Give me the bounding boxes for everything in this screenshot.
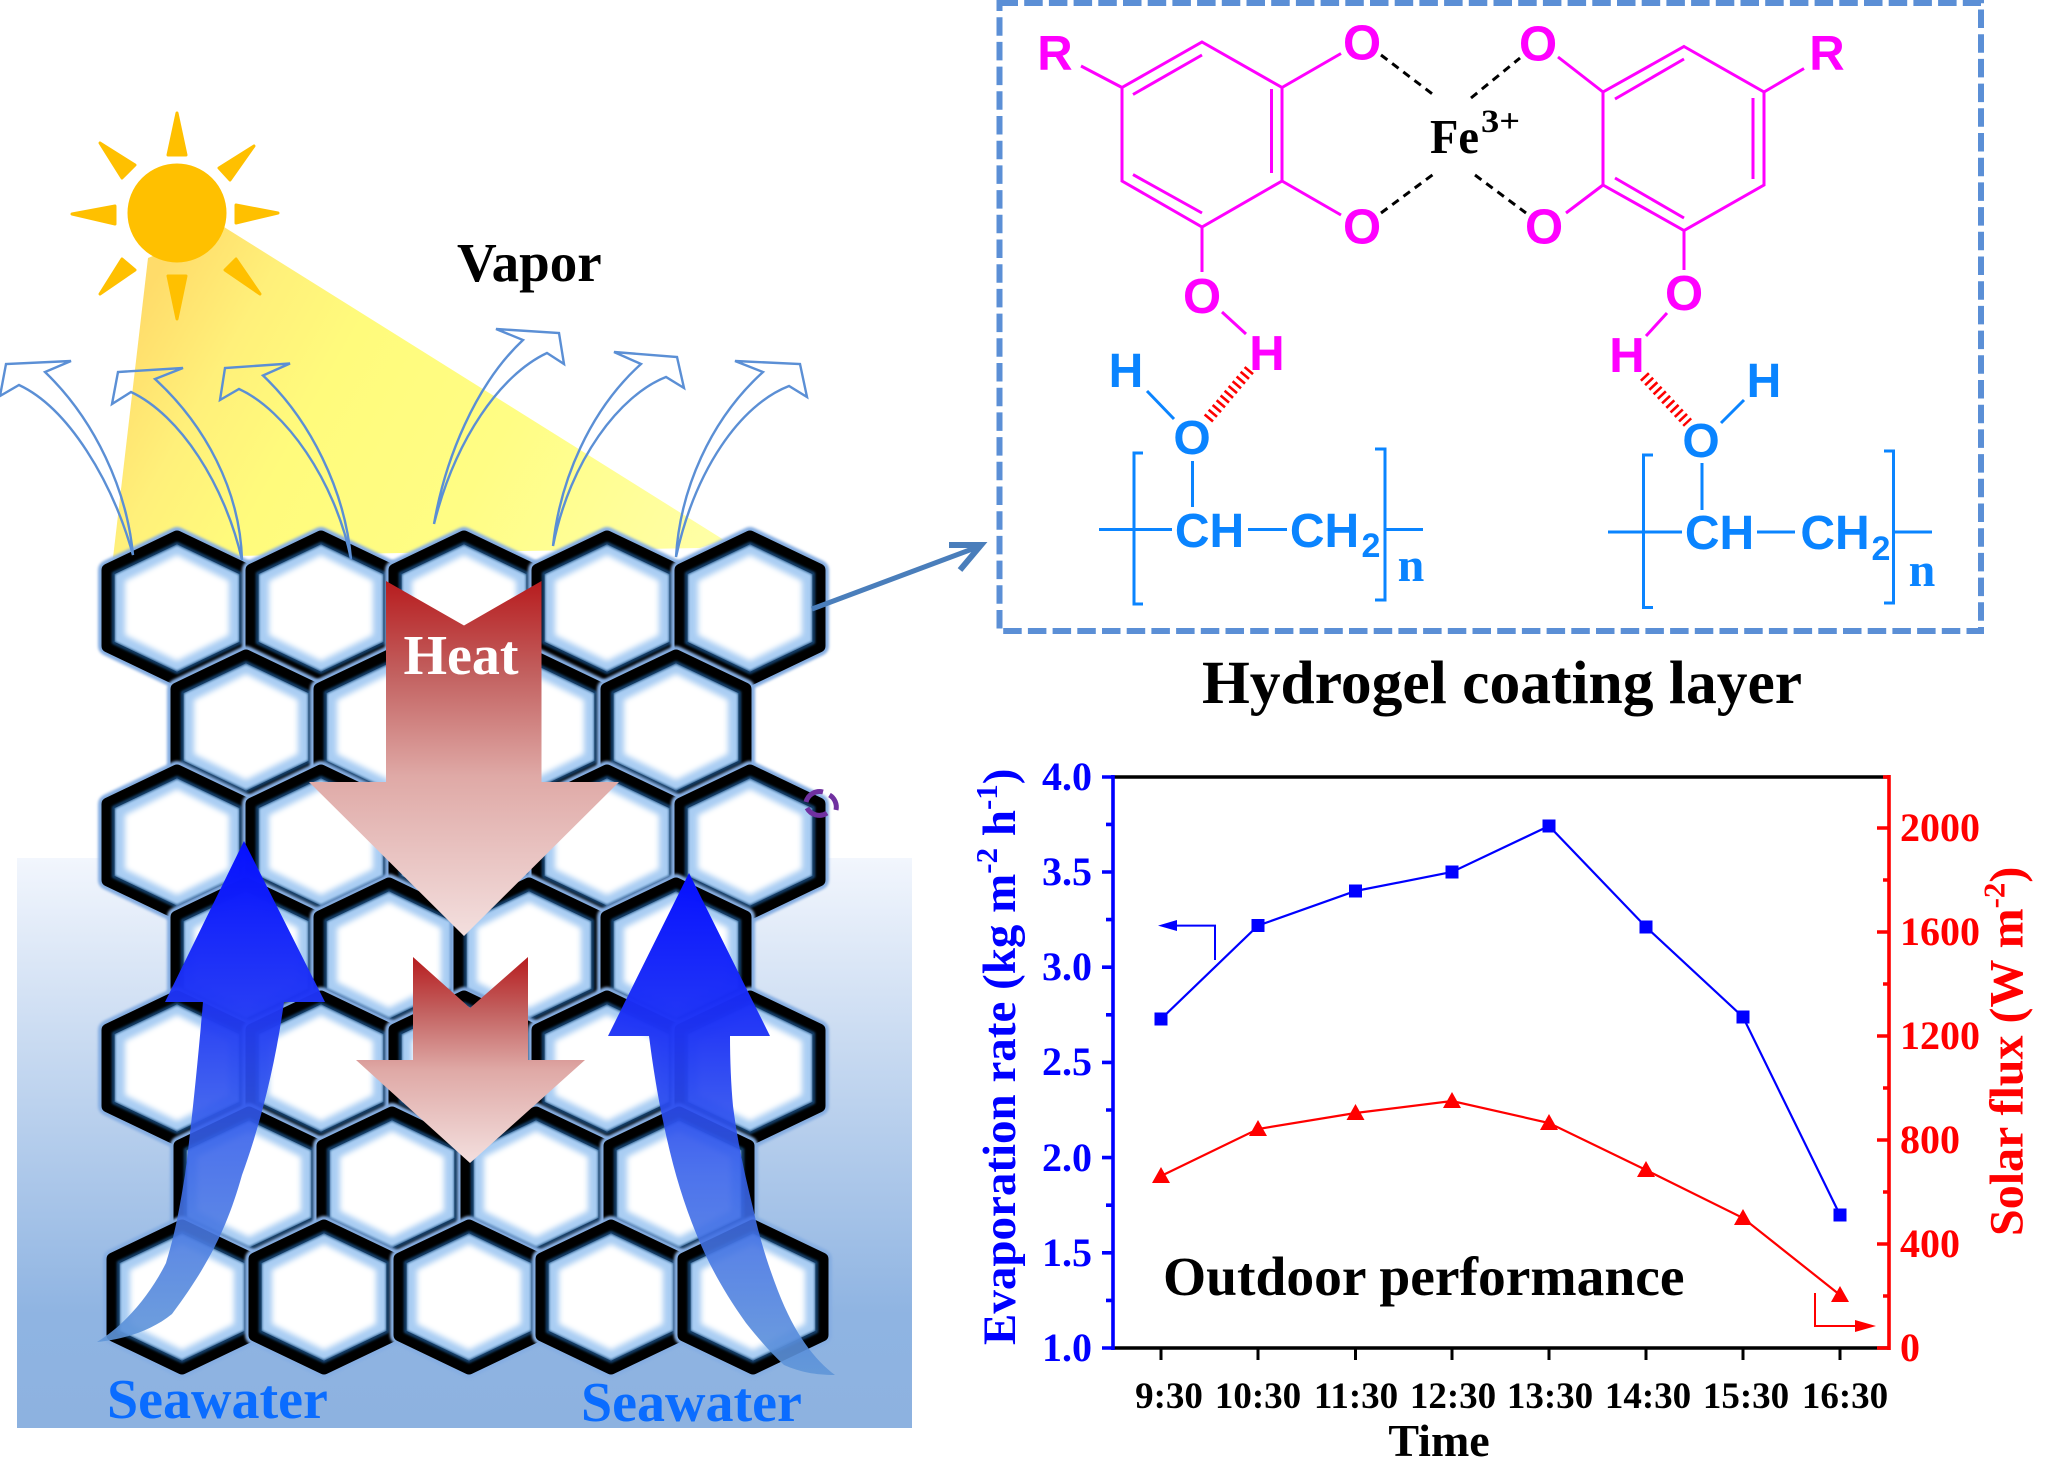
left axis tick labels: 2.0 xyxy=(1042,1135,1092,1180)
right PVA unit: CH xyxy=(1800,507,1870,560)
label: Fe3+: 3+ xyxy=(1481,104,1520,140)
panel: seawater background xyxy=(17,858,912,1428)
left PVA unit: CH xyxy=(1290,505,1359,558)
left axis tick labels: 1.0 xyxy=(1042,1325,1092,1370)
left PVA unit: 2 xyxy=(1362,527,1380,565)
x axis tick labels: 12:30 xyxy=(1410,1376,1496,1417)
x axis tick labels: 9:30 xyxy=(1135,1376,1203,1417)
blue axis indicator arrow xyxy=(1158,920,1215,960)
right PVA unit: CH xyxy=(1685,507,1754,560)
magenta atom labels: O xyxy=(1183,270,1221,324)
right seawater uptake arrow xyxy=(608,873,835,1375)
icon: sun xyxy=(72,113,278,319)
magenta atom labels xyxy=(1037,16,1845,383)
x axis title: Time xyxy=(1388,1415,1490,1466)
right PVA unit: n xyxy=(1909,544,1935,597)
magenta atom labels: H xyxy=(1609,329,1645,383)
right axis tick labels: 400 xyxy=(1900,1221,1960,1266)
right axis tick labels: 0 xyxy=(1900,1325,1920,1370)
left axis title: ) xyxy=(974,769,1026,784)
red axis indicator arrow xyxy=(1815,1293,1876,1332)
sunlight beam xyxy=(113,227,724,558)
chart: outdoor performance xyxy=(969,754,2034,1466)
left axis title: h xyxy=(974,810,1026,848)
magenta atom labels: O xyxy=(1525,200,1563,254)
left axis tick labels xyxy=(1042,754,1092,1370)
magenta atom labels: O xyxy=(1519,18,1557,72)
right axis title: -2 xyxy=(1976,883,2012,908)
magenta atom labels: R xyxy=(1809,27,1845,81)
right PVA unit: O xyxy=(1682,415,1720,468)
right catechol ring xyxy=(1558,46,1804,336)
left axis title: -1 xyxy=(969,784,1004,810)
dashed frame xyxy=(1000,3,1981,631)
right axis title: ) xyxy=(1980,867,2034,883)
left catechol ring xyxy=(1081,42,1341,334)
label: Fe3+: Fe xyxy=(1430,109,1479,164)
left axis tick labels: 1.5 xyxy=(1042,1230,1092,1275)
right PVA unit: 2 xyxy=(1872,530,1890,568)
x axis tick labels: 16:30 xyxy=(1802,1376,1888,1417)
magenta atom labels: O xyxy=(1343,200,1381,254)
label: Fe3+ xyxy=(1430,104,1520,164)
heat arrow: lower xyxy=(356,957,585,1163)
magenta atom labels: O xyxy=(1343,16,1381,70)
label: Vapor: Vapor xyxy=(457,232,602,293)
left PVA unit: H xyxy=(1109,345,1143,398)
x axis tick labels: 13:30 xyxy=(1507,1376,1593,1417)
left PVA unit: CH xyxy=(1175,505,1244,558)
left axis tick labels: 3.0 xyxy=(1042,944,1092,989)
heading: Hydrogel coating layer: Hydrogel coating layer xyxy=(1202,649,1802,717)
magenta atom labels: R xyxy=(1037,27,1073,81)
left PVA unit: O xyxy=(1173,412,1211,465)
left PVA unit: n xyxy=(1398,539,1424,592)
label: Seawater right: Seawater xyxy=(581,1372,802,1434)
pointer arrow to hydrogel panel xyxy=(812,545,981,609)
left axis tick labels: 2.5 xyxy=(1042,1039,1092,1084)
x axis tick labels: 15:30 xyxy=(1703,1376,1789,1417)
right PVA unit: H xyxy=(1747,355,1781,408)
x axis tick labels xyxy=(1135,1376,1888,1417)
heat arrow: upper xyxy=(309,581,619,936)
Fe3+ coordination bonds xyxy=(1381,55,1526,213)
right axis tick labels: 2000 xyxy=(1900,805,1980,850)
magenta atom labels: H xyxy=(1249,327,1285,381)
chart axes xyxy=(1102,775,1889,1360)
magenta atom labels: O xyxy=(1665,267,1703,321)
right PVA unit xyxy=(1608,355,1935,608)
left axis tick labels: 4.0 xyxy=(1042,754,1092,799)
x axis tick labels: 11:30 xyxy=(1314,1376,1398,1417)
panel: hydrogel coating chemistry xyxy=(1000,3,1981,631)
left PVA unit xyxy=(1099,345,1424,604)
evaporation rate series xyxy=(1154,820,1846,1222)
honeycomb structure xyxy=(108,537,822,1368)
vapor arrows xyxy=(0,329,807,560)
label: Heat: Heat xyxy=(403,625,519,687)
right axis tick labels xyxy=(1900,805,1980,1370)
left axis tick labels: 3.5 xyxy=(1042,849,1092,894)
right axis title: Solar flux (W m xyxy=(1980,908,2034,1236)
solar flux series xyxy=(1152,1092,1849,1302)
label: Seawater left: Seawater xyxy=(107,1369,328,1431)
left axis title: -2 xyxy=(969,848,1004,874)
x axis tick labels: 10:30 xyxy=(1215,1376,1301,1417)
label: Outdoor performance: Outdoor performance xyxy=(1163,1247,1685,1308)
right axis tick labels: 800 xyxy=(1900,1117,1960,1162)
hydrogen bonds xyxy=(1208,368,1688,423)
left axis title: Evaporation rate (kg m xyxy=(974,874,1026,1345)
x axis tick labels: 14:30 xyxy=(1605,1376,1691,1417)
icon: small purple dashed ring xyxy=(806,792,836,815)
right axis tick labels: 1600 xyxy=(1900,909,1980,954)
right axis tick labels: 1200 xyxy=(1900,1013,1980,1058)
left seawater uptake arrow xyxy=(97,841,325,1342)
